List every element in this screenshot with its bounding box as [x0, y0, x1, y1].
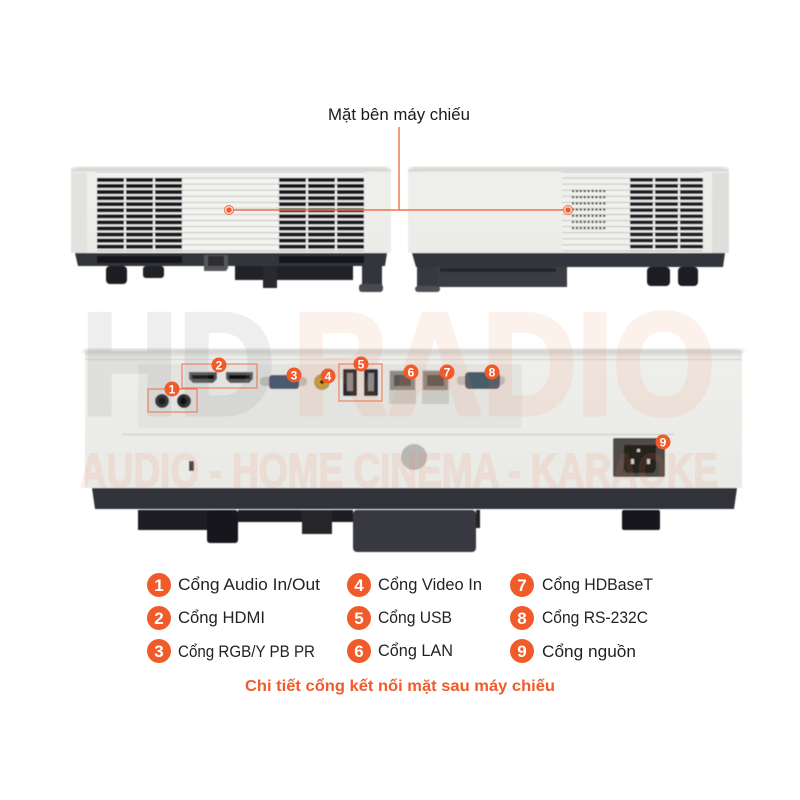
legend item 4: 4	[354, 576, 364, 595]
marker: right side	[564, 206, 572, 214]
legend item 3	[147, 639, 315, 663]
legend item 2	[147, 606, 265, 630]
port: video RCA	[314, 374, 330, 390]
port: USB	[343, 369, 378, 396]
legend item 9	[510, 639, 636, 663]
legend item 9: Cổng nguồn	[542, 642, 636, 661]
legend item 2: Cổng HDMI	[178, 608, 265, 627]
highlight box: USB	[339, 364, 382, 401]
highlight box: audio	[148, 389, 197, 412]
legend item 6	[347, 639, 453, 663]
legend item 9: 9	[517, 642, 527, 661]
port: LAN	[389, 370, 416, 404]
legend item 7: 7	[517, 576, 527, 595]
projector: rear view	[85, 349, 742, 552]
legend item 2: 2	[154, 609, 164, 628]
legend item 6: Cổng LAN	[378, 641, 453, 660]
watermark: HD RADIO logo	[81, 283, 715, 445]
port: audio jacks	[155, 394, 191, 408]
port number badges: 3	[291, 368, 298, 382]
port number badges: 4	[325, 370, 332, 384]
watermark: HD RADIO logo: RADIO	[293, 283, 715, 445]
marker: left side	[224, 206, 234, 214]
legend item 7: Cổng HDBaseT	[542, 575, 653, 594]
port number badges	[164, 356, 670, 450]
projector: left side view	[71, 167, 391, 292]
legend item 7	[510, 573, 653, 597]
legend item 8	[510, 606, 648, 630]
port number badges: 6	[408, 366, 415, 380]
legend item 5: Cổng USB	[378, 608, 452, 627]
port number badges: 7	[444, 366, 451, 380]
watermark: HD RADIO logo: HD	[81, 283, 275, 445]
port: VGA	[260, 375, 307, 389]
legend item 4	[347, 573, 482, 597]
legend	[147, 573, 653, 663]
projector: right side view	[408, 167, 729, 292]
legend item 8: Cổng RS-232C	[542, 608, 648, 627]
legend item 1: 1	[154, 576, 164, 595]
legend item 5	[347, 606, 452, 630]
port: HDMI	[189, 372, 253, 383]
legend item 1	[147, 573, 320, 597]
heading: side view: Mặt bên máy chiếu	[328, 105, 470, 124]
highlight box: HDMI	[182, 364, 257, 388]
legend item 4: Cổng Video In	[378, 575, 482, 594]
legend item 5: 5	[354, 609, 364, 628]
caption: Chi tiết cổng kết nối mặt sau máy chiếu	[245, 678, 555, 695]
port: HDBaseT	[422, 370, 449, 404]
legend item 6: 6	[354, 642, 364, 661]
callout connector lines	[229, 127, 568, 210]
port: RS-232C	[457, 372, 505, 389]
legend item 1: Cổng Audio In/Out	[178, 575, 320, 594]
port number badges: 1	[169, 382, 176, 396]
legend item 3: 3	[154, 642, 164, 661]
legend item 8: 8	[517, 609, 527, 628]
port number badges: 2	[216, 358, 223, 372]
port number badges: 9	[660, 436, 667, 450]
port: power inlet	[613, 438, 665, 477]
port number badges: 8	[489, 366, 496, 380]
port number badges: 5	[358, 358, 365, 372]
legend item 3: Cổng RGB/Y PB PR	[178, 642, 315, 661]
